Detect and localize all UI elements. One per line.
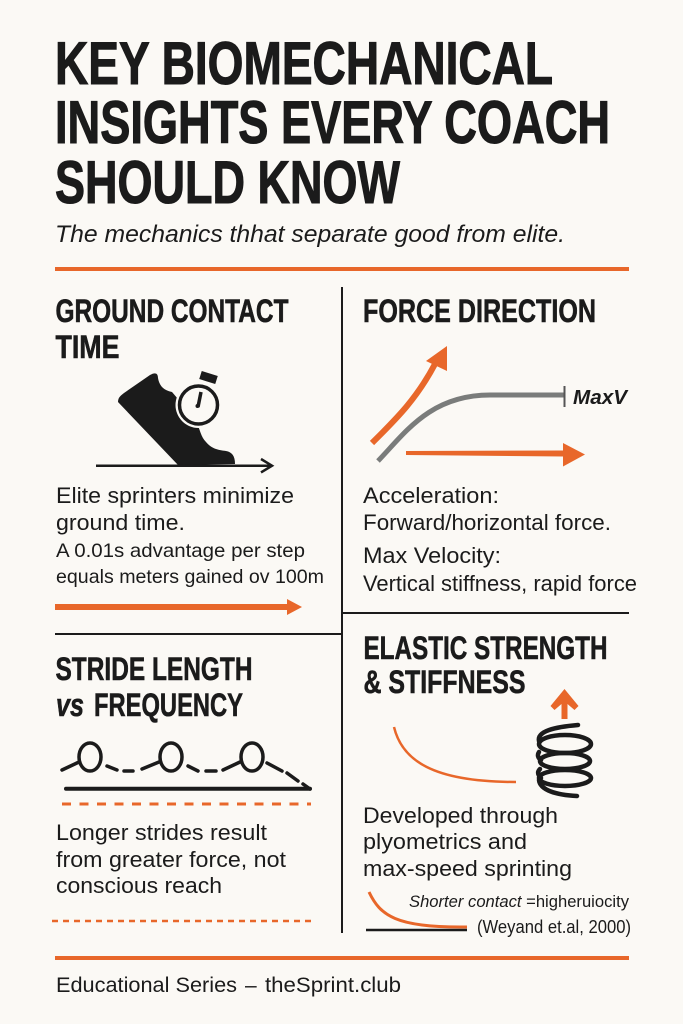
footer: – [245,974,257,997]
panel: stride length vs frequency [52,651,313,921]
top orange rule [55,267,629,271]
panel: ground contact time [55,293,324,615]
text: elastic body: max-speed sprinting [363,856,572,881]
text: force direction body: Max Velocity: [363,543,501,568]
heading: ground contact time [56,293,289,365]
footer: theSprint.club [265,974,401,997]
heading: elastic strength [364,630,608,700]
bottom orange rule [55,956,629,960]
text: force direction body: Acceleration: [363,483,499,508]
chart: force direction curves [372,346,629,466]
text: ground contact body: A 0.01s advantage per step [56,540,305,562]
text: ground contact body: equals meters gained ov 100m [56,566,324,588]
label: MaxV: MaxV [573,387,629,409]
text: stride body: Longer strides result [56,820,267,845]
panel: force direction [363,293,637,596]
dashed orange line lower [52,920,313,922]
dashed orange line [62,802,311,806]
text: elastic body: Developed through [363,803,558,828]
title: SHOULD KNOW [55,149,400,216]
heading: ground contact time: GROUND CONTACT [56,293,289,329]
text: force direction body: Vertical stiffness, rapid force [363,571,637,596]
text: force direction body [363,483,637,596]
text: force direction body: Forward/horizontal force. [363,510,611,535]
text: elastic body [363,803,572,881]
text: elastic body: plyometrics and [363,829,527,854]
chart: contact curve [366,892,467,930]
text: stride body [56,820,286,898]
icon: stride diagram [62,743,310,789]
icon: shoe with stopwatch on ground arrow [96,373,272,472]
text: ground contact body [56,483,324,588]
heading: elastic strength: ELASTIC STRENGTH [364,630,608,666]
chart: elastic curve [394,727,516,782]
heading: stride length vs frequency: STRIDE LENGTH [56,651,252,687]
heading: stride length vs frequency: FREQUENCY [94,687,243,723]
heading: force direction: FORCE DIRECTION [363,293,596,329]
text: stride body: from greater force, not [56,847,286,872]
panel dividers [55,287,629,933]
subtitle: The mechanics thhat separate good from elite. [55,221,565,248]
text: citation [409,892,631,937]
arrow: orange [55,599,302,615]
text: citation: (Weyand et.al, 2000) [477,917,631,937]
text: ground contact body: Elite sprinters minimize [56,483,294,508]
panel: elastic strength and stiffness [363,630,631,937]
footer: Educational Series [56,974,237,997]
heading: stride length vs frequency [56,651,252,723]
title [55,30,610,216]
icon: orange up arrow [550,689,578,719]
text: citation: Shorter contact =higheruiocity [409,892,629,911]
text: ground contact body: ground time. [56,510,185,535]
heading: stride length vs frequency: vs [56,687,84,723]
text: stride body: conscious reach [56,873,222,898]
heading: elastic strength: & STIFFNESS [364,664,526,700]
heading: ground contact time: TIME [56,329,120,365]
footer [56,974,401,997]
icon: spring [538,725,591,796]
